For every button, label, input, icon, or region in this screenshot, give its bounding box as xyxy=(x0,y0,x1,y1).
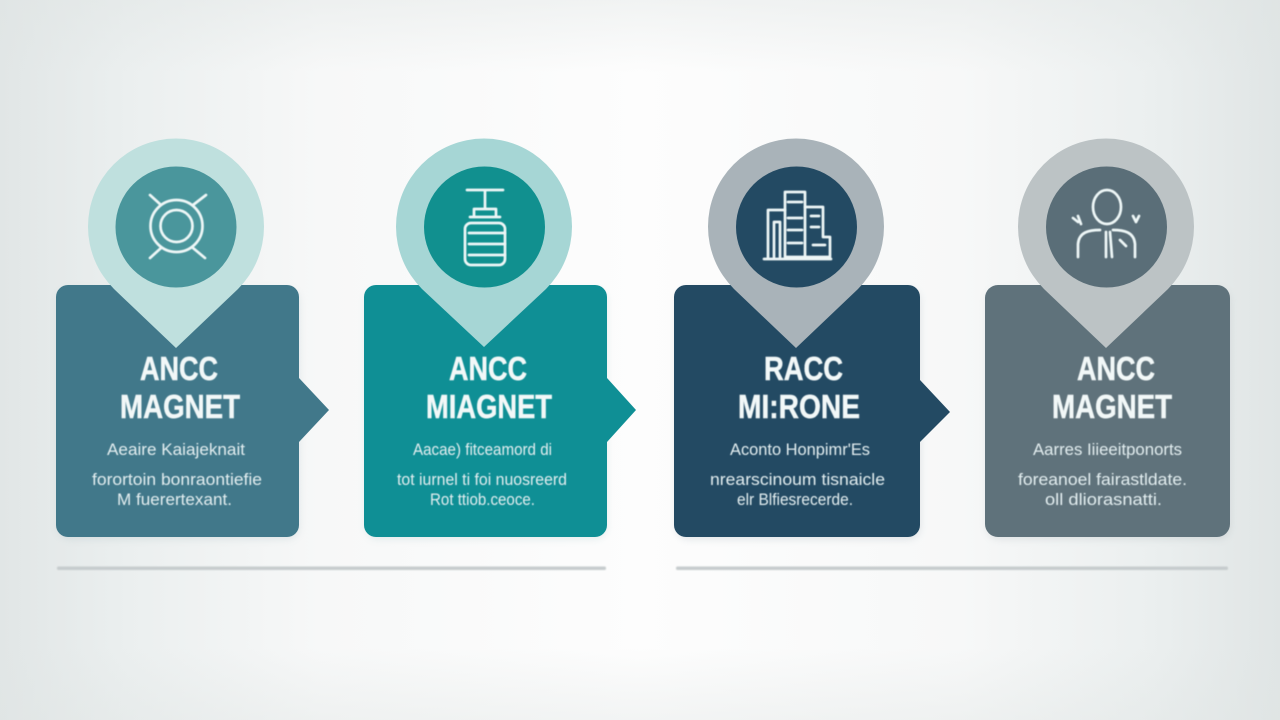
card 4 body text: foreanoel fairastldate. xyxy=(1018,470,1187,489)
card 3 icon disc xyxy=(736,166,857,288)
card 2 body text: Aacae) fitceamord di xyxy=(413,440,552,459)
icon: valve and stacked tank xyxy=(465,190,505,265)
baseline rule right xyxy=(676,566,1228,570)
card 1 body text: forortoin bonraontiefie xyxy=(92,470,262,489)
card 1 body text: M fuerertexant. xyxy=(117,490,232,509)
panel: card 1 xyxy=(56,139,329,539)
card 1 body text: Aeaire Kaiajeknait xyxy=(107,440,245,459)
card 4 heading: MAGNET xyxy=(1052,388,1172,425)
card 1 icon disc xyxy=(116,166,236,288)
card 2 heading: MIAGNET xyxy=(426,388,552,425)
card 2 heading: ANCC xyxy=(449,350,527,387)
card 2 heading xyxy=(426,350,552,425)
baseline rule left xyxy=(57,566,606,570)
card 3 heading xyxy=(738,350,860,425)
card 4 pin xyxy=(1018,139,1194,348)
card 4 body text: oll dliorasnatti. xyxy=(1045,490,1162,509)
card 1 pin xyxy=(88,139,264,348)
panel: card 3 xyxy=(674,139,950,539)
card 4 heading xyxy=(1052,350,1172,425)
card 1 heading xyxy=(120,350,240,425)
icon: person xyxy=(1073,190,1139,257)
card 3 body text: Aconto Honpimr'Es xyxy=(730,440,870,459)
card 3 body text xyxy=(710,440,885,509)
card 2 body text: tot iurnel ti foi nuosreerd xyxy=(397,470,567,489)
card 1 body text xyxy=(92,440,262,509)
card 4 heading: ANCC xyxy=(1077,350,1155,387)
card 3 body with arrow xyxy=(674,285,950,537)
card 2 pin xyxy=(396,139,572,347)
card 1 body with arrow xyxy=(56,285,329,537)
panel: card 2 xyxy=(364,139,636,539)
card 4 body text xyxy=(1018,440,1187,509)
card 3 heading: RACC xyxy=(764,350,843,387)
card 4 icon disc xyxy=(1046,166,1167,288)
card 2 body text xyxy=(397,440,567,509)
card 4 body xyxy=(985,285,1230,537)
card 3 body text: nrearscinoum tisnaicle xyxy=(710,470,885,489)
card 1 heading: ANCC xyxy=(140,350,218,387)
panel: card 4 xyxy=(985,139,1230,539)
card 4 body text: Aarres Iiieeitponorts xyxy=(1033,440,1182,459)
card 2 icon disc xyxy=(424,166,545,288)
card 3 pin xyxy=(708,139,884,348)
card 2 body text: Rot ttiob.ceoce. xyxy=(430,490,535,509)
icon: city buildings xyxy=(764,192,831,259)
card 1 heading: MAGNET xyxy=(120,388,240,425)
card 3 heading: MI:RONE xyxy=(738,388,860,425)
card 2 body with arrow xyxy=(364,285,636,537)
icon: target with crossed lines xyxy=(150,195,206,258)
card 3 body text: elr Blfiesrecerde. xyxy=(737,490,853,509)
